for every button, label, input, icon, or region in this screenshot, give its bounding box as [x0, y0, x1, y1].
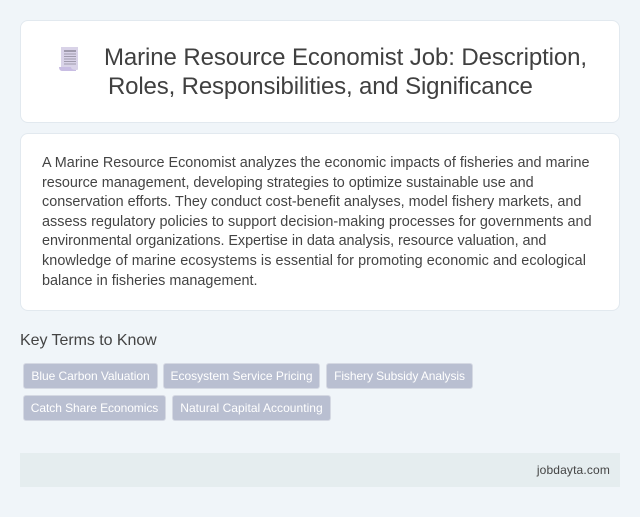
- description text: knowledge of marine ecosystems is essential for promoting economic and ecological: [42, 252, 586, 268]
- tag: [23, 363, 158, 389]
- footer site name: jobdayta.com: [537, 463, 610, 477]
- tag: Catch Share Economics: [31, 401, 158, 415]
- description text: conservation efforts. They conduct cost-benefit analyses, model fishery markets, and: [42, 194, 581, 210]
- description text: A Marine Resource Economist analyzes the economic impacts of fisheries and marine: [42, 155, 590, 171]
- description text: balance in fisheries management.: [42, 272, 258, 288]
- title line 1: Marine Resource Economist Job: Description,: [104, 44, 587, 71]
- tag: Blue Carbon Valuation: [31, 369, 150, 383]
- tag: [326, 363, 473, 389]
- description text: [42, 155, 592, 288]
- icon: document scroll: [59, 47, 78, 71]
- description text: environmental organizations. Expertise in data analysis, resource valuation, and: [42, 233, 546, 249]
- tag: Natural Capital Accounting: [180, 401, 323, 415]
- description text: assess regulatory policies to support decision-making processes for governments and: [42, 214, 592, 230]
- tag: Fishery Subsidy Analysis: [334, 369, 465, 383]
- tag list: [23, 363, 473, 421]
- description text: resource management, developing strategies to optimize sustainable use and: [42, 174, 534, 190]
- panel: title card: [20, 20, 620, 123]
- panel: description card: [20, 133, 620, 311]
- heading: key terms: Key Terms to Know: [20, 332, 157, 349]
- tag: Ecosystem Service Pricing: [170, 369, 313, 383]
- tag: [172, 395, 331, 421]
- title line 2: Roles, Responsibilities, and Significance: [108, 73, 533, 100]
- footer bar: [20, 453, 620, 487]
- tag: [23, 395, 166, 421]
- tag: [163, 363, 320, 389]
